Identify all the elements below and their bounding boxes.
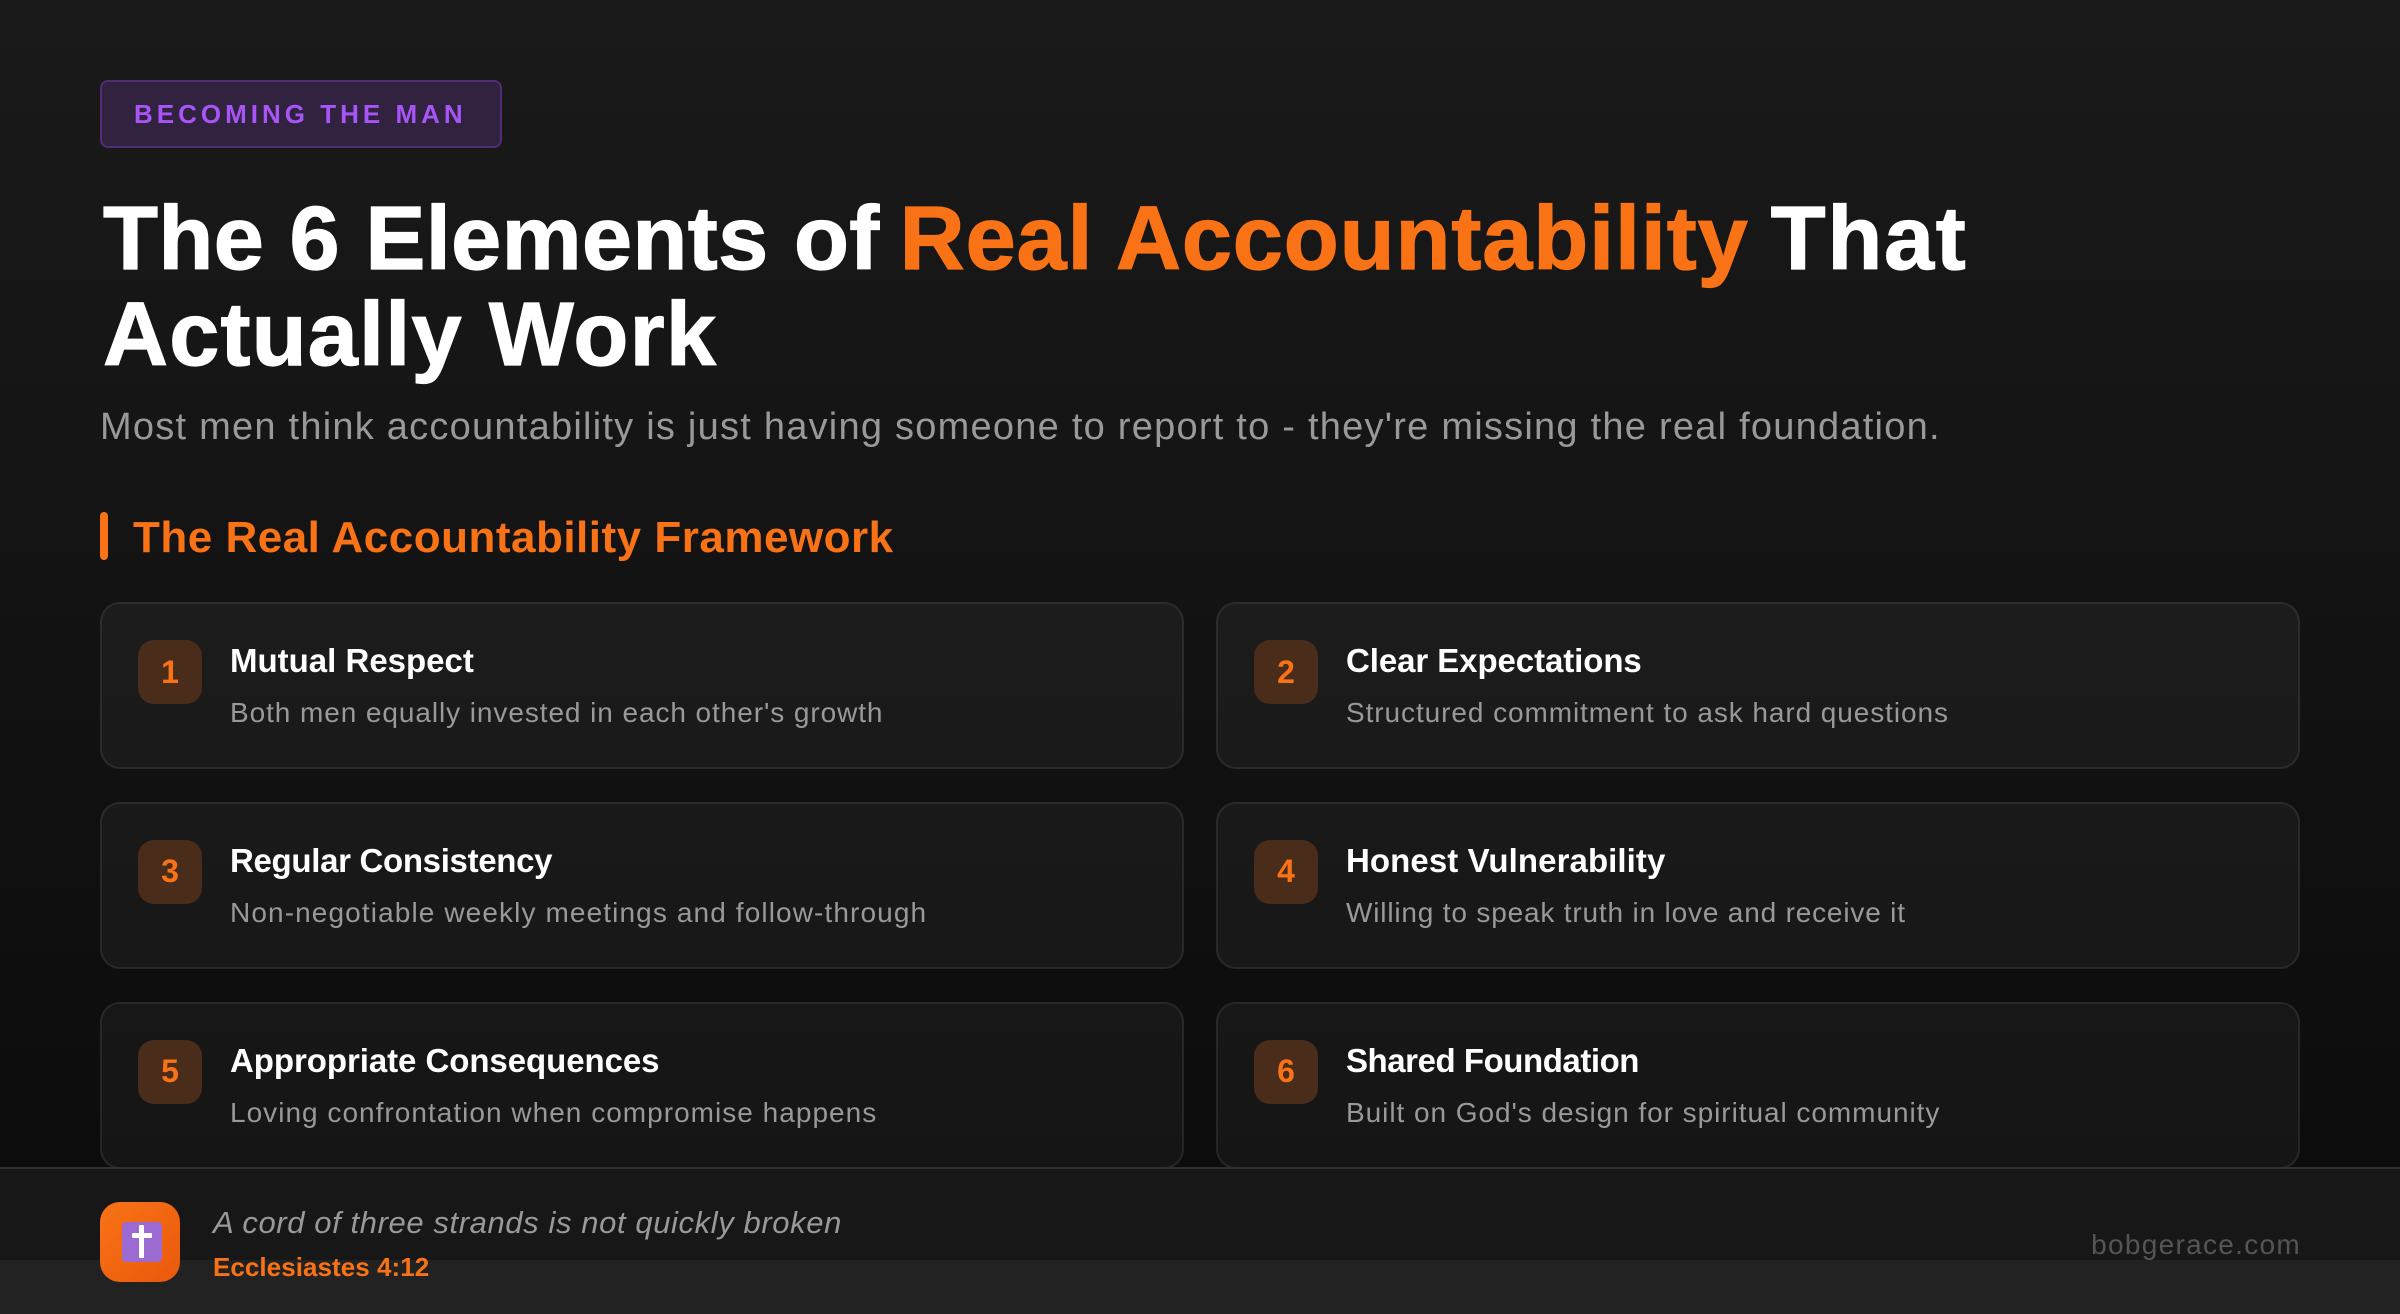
panel: element 1 Mutual Respect: 1 <box>161 654 179 690</box>
panel: element 3 Regular Consistency <box>100 802 1184 969</box>
title <box>103 189 1967 385</box>
panel: element 5 Appropriate Consequences <box>100 1002 1184 1169</box>
panel: element 1 Mutual Respect: Mutual Respect <box>230 642 474 679</box>
panel: element 6 Shared Foundation: 6 <box>1277 1053 1295 1089</box>
panel: element 3 Regular Consistency: 3 <box>161 853 179 889</box>
icon: cross <box>100 1202 180 1282</box>
panel: element 5 Appropriate Consequences: Appropriate Consequences <box>230 1042 659 1079</box>
title: Actually Work <box>103 285 717 385</box>
panel: element 4 Honest Vulnerability: 4 <box>1277 853 1295 889</box>
panel: element 4 Honest Vulnerability: Willing to speak truth in love and receive it <box>1346 897 1906 928</box>
panel: element 2 Clear Expectations: Structured commitment to ask hard questions <box>1346 697 1949 728</box>
badge: Becoming the Man: BECOMING THE MAN <box>134 99 467 129</box>
panel: element 5 Appropriate Consequences: 5 <box>161 1053 179 1089</box>
panel: element 2 Clear Expectations: 2 <box>1277 654 1295 690</box>
panel: element 3 Regular Consistency: Regular Consistency <box>230 842 552 879</box>
section heading: framework: The Real Accountability Framework <box>133 513 894 562</box>
subtitle: Most men think accountability is just having someone to report to - they're missing the real foundation. <box>100 406 1941 448</box>
quote: A cord of three strands is not quickly broken <box>213 1205 842 1240</box>
footer bar <box>0 1167 2400 1260</box>
panel: element 6 Shared Foundation: Built on God's design for spiritual community <box>1346 1097 1940 1128</box>
panel: element 2 Clear Expectations <box>1216 602 2300 769</box>
panel: element 2 Clear Expectations: Clear Expectations <box>1346 642 1642 679</box>
panel: element 6 Shared Foundation <box>1216 1002 2300 1169</box>
panel: element 6 Shared Foundation: Shared Foundation <box>1346 1042 1639 1079</box>
title: The 6 Elements of Real Accountability That <box>103 189 1967 289</box>
panel: element 4 Honest Vulnerability: Honest Vulnerability <box>1346 842 1665 879</box>
panel: element 5 Appropriate Consequences: Loving confrontation when compromise happens <box>230 1097 877 1128</box>
website credit: bobgerace.com <box>2091 1229 2301 1260</box>
panel: element 1 Mutual Respect: Both men equally invested in each other's growth <box>230 697 883 728</box>
scripture reference: Ecclesiastes 4:12 <box>213 1252 429 1282</box>
panel: element 3 Regular Consistency: Non-negotiable weekly meetings and follow-through <box>230 897 927 928</box>
panel: element 4 Honest Vulnerability <box>1216 802 2300 969</box>
panel: element 1 Mutual Respect <box>100 602 1184 769</box>
badge: Becoming the Man <box>100 80 502 148</box>
